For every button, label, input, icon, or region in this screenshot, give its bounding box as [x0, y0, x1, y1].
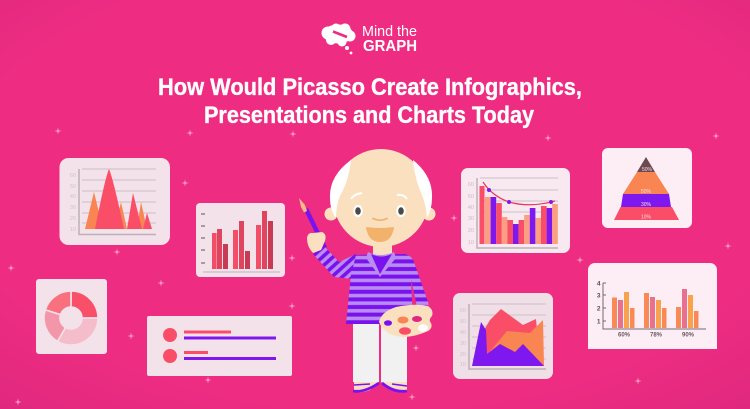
panel: bars with line chart: 10 [468, 240, 474, 246]
panel: grouped bar chart: 3 [597, 292, 601, 300]
panel: pyramid chart: 30% [641, 202, 652, 208]
panel: grouped bar chart: 78% [650, 332, 663, 338]
ears [324, 208, 436, 220]
panel: bars with line chart: 50 [468, 194, 474, 200]
panel: bars with line chart: 20 [468, 228, 474, 234]
title: Presentations and Charts Today [204, 102, 535, 129]
panel: grouped bar chart: 2 [597, 306, 601, 312]
shoes [353, 382, 407, 392]
eyes [353, 205, 406, 217]
hand [307, 232, 326, 253]
logo: Mind the Graph [322, 24, 417, 55]
palette [379, 305, 432, 337]
panel: donut chart [36, 279, 107, 354]
panel: pyramid chart: 50% [642, 167, 653, 173]
collar [366, 252, 396, 277]
panel: area peaks chart: 50 [70, 184, 76, 190]
panel: grouped bar chart: 60% [618, 332, 631, 338]
icon: paintbrush [299, 198, 327, 249]
panel: layered area chart: 50 [460, 319, 466, 325]
logo: Mind the Graph: GRAPH [363, 38, 417, 55]
panel: grouped bar chart: 90% [682, 332, 695, 338]
panel: bars with line chart: 60 [468, 182, 474, 188]
panel: grouped bar chart: 1 [597, 318, 601, 326]
neck [373, 240, 392, 256]
panel: area peaks chart: 30 [70, 205, 76, 211]
panel: bars with line chart [461, 168, 570, 253]
panel: bars with line chart: 30 [468, 216, 474, 222]
panel: layered area chart: 60 [460, 308, 466, 314]
title: How Would Picasso Create Infographics, [158, 74, 582, 101]
panel: layered area chart: 30 [460, 341, 466, 347]
mouth [366, 227, 394, 242]
panel: pyramid chart: 10% [641, 214, 652, 220]
panel: list [147, 316, 292, 376]
panel: pyramid chart: 50% [641, 189, 652, 195]
legs [353, 322, 407, 382]
nose [373, 218, 387, 220]
panel: layered area chart: 10 [460, 362, 466, 368]
panel: layered area chart [453, 293, 553, 379]
panel: layered area chart: 20 [460, 352, 466, 358]
panel: area peaks chart: 10 [70, 227, 76, 233]
panel: area peaks chart: 20 [70, 216, 76, 222]
hair [330, 160, 432, 218]
panel: area peaks chart: 40 [70, 194, 76, 200]
panel: area peaks chart [60, 158, 170, 245]
panel: grouped bar chart: 4 [597, 280, 601, 288]
logo text: Mind the [362, 24, 417, 40]
icon: brain [322, 24, 356, 54]
character: Picasso [299, 149, 436, 392]
sweater [346, 254, 429, 324]
eyebrows [351, 193, 407, 199]
head [333, 149, 429, 247]
sparkles [7, 127, 732, 406]
left arm [313, 247, 356, 279]
title [158, 74, 582, 129]
panel: pyramid chart [602, 148, 692, 228]
panel: area peaks chart: 60 [70, 173, 76, 179]
panel: layered area chart: 40 [460, 330, 466, 336]
panel: red bar chart [196, 203, 285, 277]
panel: grouped bar chart [588, 263, 717, 349]
panel: bars with line chart: 40 [468, 205, 474, 211]
